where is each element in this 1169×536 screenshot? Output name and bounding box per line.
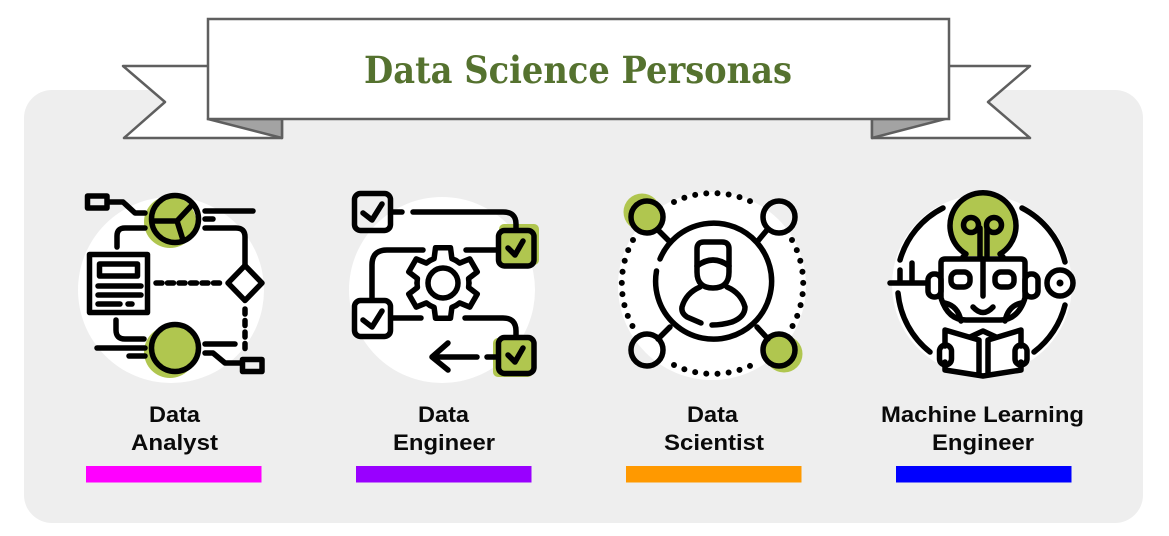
label: Data Analyst: Data xyxy=(149,402,201,427)
label: Machine Learning Engineer xyxy=(881,402,1084,455)
persona: Data Scientist xyxy=(618,192,806,482)
label: Data Analyst: Analyst xyxy=(131,430,219,455)
label: Data Engineer: Engineer xyxy=(393,430,495,455)
persona: Data Engineer xyxy=(349,194,539,482)
label: Data Scientist xyxy=(664,402,765,455)
icon: robot with light bulb and book xyxy=(890,193,1073,376)
icon: data engineer gear and checklist xyxy=(349,194,539,383)
bar: orange xyxy=(626,466,802,482)
banner ribbon with title xyxy=(123,19,1030,138)
label: Data Engineer xyxy=(393,402,495,455)
left ribbon tail xyxy=(123,66,282,138)
bar: blue xyxy=(896,466,1072,482)
label: Machine Learning Engineer: Engineer xyxy=(932,430,1034,455)
persona: Data Analyst xyxy=(78,196,264,482)
label: Machine Learning Engineer: Machine Learning xyxy=(881,402,1084,427)
right ribbon tail xyxy=(872,66,1030,138)
label: Data Scientist: Scientist xyxy=(664,430,765,455)
label: Data Analyst xyxy=(131,402,219,455)
label: Data Engineer: Data xyxy=(418,402,470,427)
icon: data scientist network xyxy=(618,192,806,380)
label: Data Scientist: Data xyxy=(687,402,739,427)
icon: data analyst flowchart xyxy=(78,196,264,383)
title: Data Science Personas xyxy=(364,48,792,92)
persona: Machine Learning Engineer xyxy=(881,193,1084,483)
banner main rectangle xyxy=(208,19,949,119)
bar: purple xyxy=(356,466,532,482)
bar: magenta xyxy=(86,466,262,482)
panel: grey background xyxy=(24,90,1143,523)
